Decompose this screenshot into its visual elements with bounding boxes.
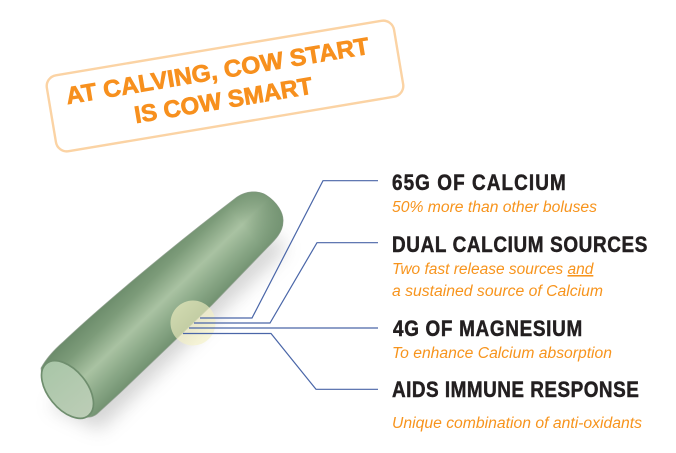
feature: 4g of magnesium: To enhance Calcium absorption — [392, 345, 612, 362]
feature: aids immune response — [392, 378, 642, 432]
title: slogan: IS COW SMART — [132, 73, 315, 129]
feature: dual calcium sources: DUAL CALCIUM SOURCES — [392, 233, 647, 257]
leader lines — [183, 181, 378, 389]
feature: 4g of magnesium — [392, 317, 612, 362]
title: slogan: AT CALVING, COW START — [64, 33, 371, 110]
feature: dual calcium sources — [392, 233, 647, 300]
icon: green bolus capsule — [31, 192, 285, 430]
feature: aids immune response: Unique combination of anti-oxidants — [392, 415, 642, 432]
feature: dual calcium sources: Two fast release sources and — [392, 261, 595, 278]
highlight circle — [170, 300, 216, 346]
feature: 65g of calcium: 65G OF CALCIUM — [392, 171, 566, 195]
feature: 65g of calcium — [392, 171, 597, 216]
bolus end face — [31, 351, 104, 428]
title: slogan — [64, 33, 376, 140]
feature: aids immune response: AIDS IMMUNE RESPONSE — [392, 378, 639, 402]
feature: 65g of calcium: 50% more than other boluses — [392, 199, 597, 216]
callout: slogan stamp — [45, 19, 405, 153]
feature: dual calcium sources: a sustained source of Calcium — [392, 283, 603, 300]
feature: 4g of magnesium: 4G OF MAGNESIUM — [393, 317, 582, 341]
